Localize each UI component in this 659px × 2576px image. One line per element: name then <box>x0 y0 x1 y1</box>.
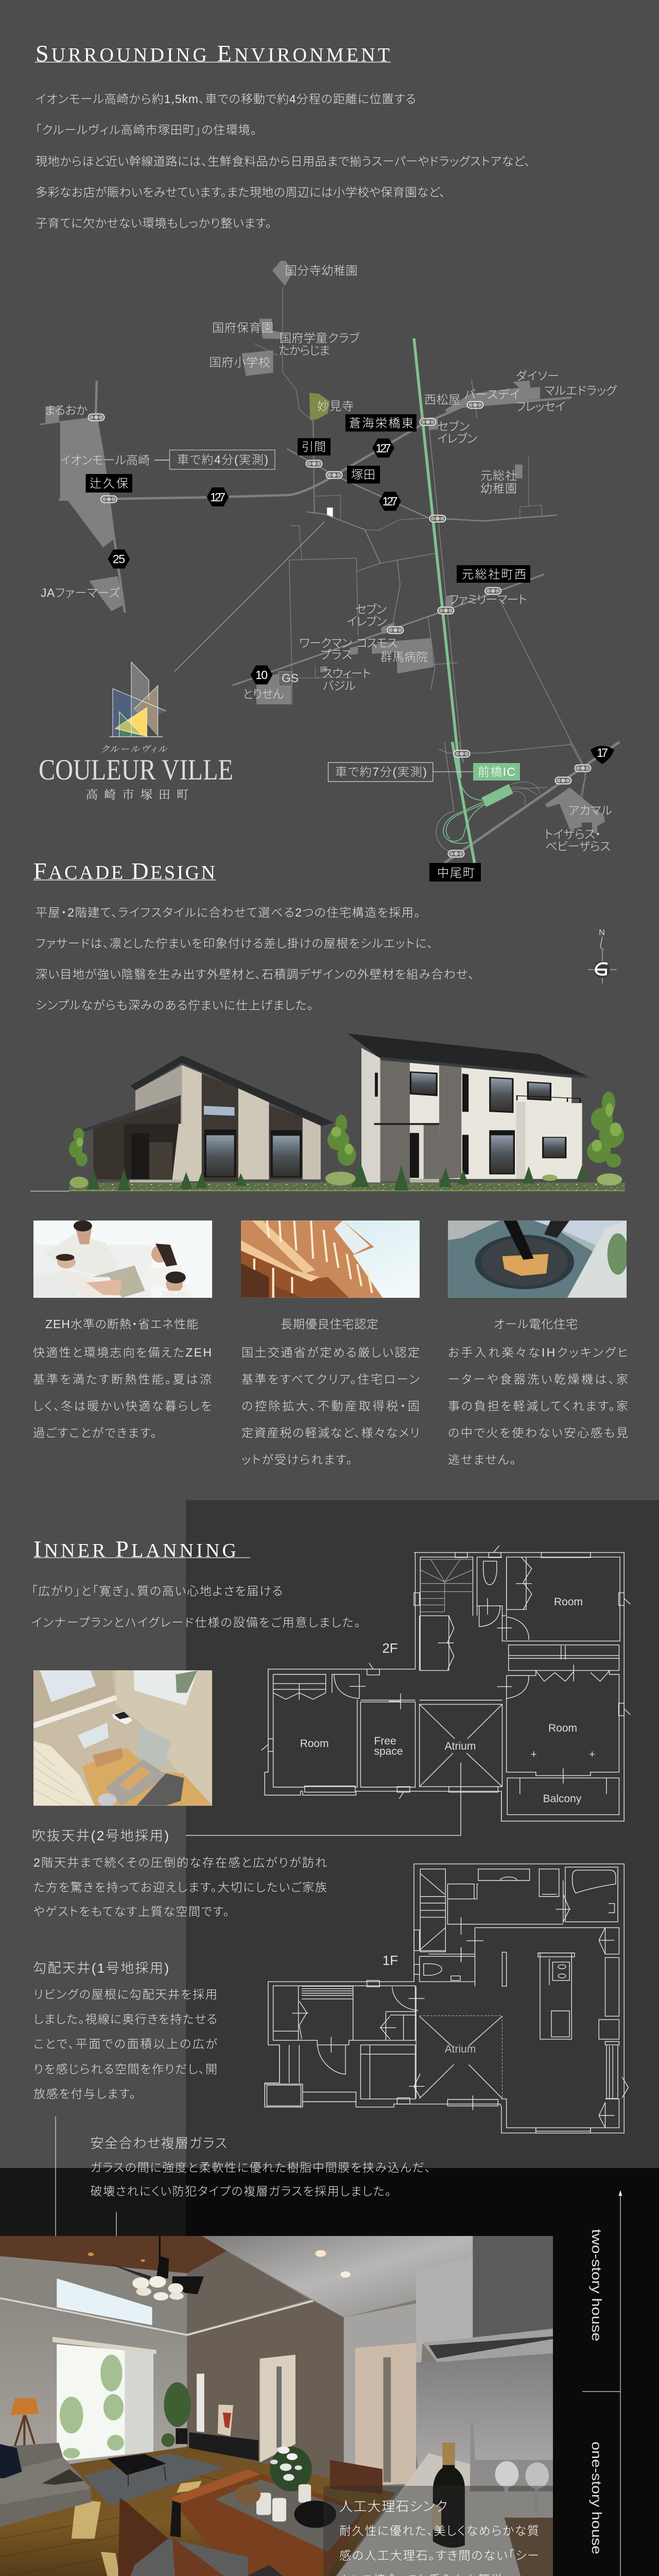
text block: long-life quality housing <box>241 1317 420 1466</box>
route shields: 127 <box>210 490 226 504</box>
map labels: facilities: アカマル <box>568 804 612 817</box>
text block: atrium ceiling: やゲストをもてなす上質な空間です。 <box>33 1905 229 1918</box>
heading: Surrounding Environment: SURROUNDING ENVIRONMENT <box>36 40 390 66</box>
text block: artificial marble sink: 耐久性に優れた、美しくなめらかな質 <box>339 2524 539 2537</box>
callout: 4 minutes by car: 車で約4分(実測) <box>177 453 268 466</box>
text block: laminated glass <box>91 2136 430 2198</box>
text block: all-electric housing: オール電化住宅 <box>494 1317 578 1331</box>
map labels: facilities: スウィート <box>322 667 371 680</box>
map labels: facilities: セブン <box>437 419 470 433</box>
decorative vertical leader lines <box>56 2116 116 2576</box>
room labels 1F: 1F <box>383 1953 398 1968</box>
room labels 2F: Free <box>374 1735 396 1747</box>
photo: living and dining room <box>0 2236 553 2576</box>
text block: sloped ceiling: ことで、平面での面積以上の広が <box>33 2037 217 2050</box>
text block: long-life quality housing: 長期優良住宅認定 <box>281 1317 378 1331</box>
logo: Couleur Ville: COULEUR VILLE <box>39 754 233 786</box>
text block: sloped ceiling: しました。視線に奥行きを持たせる <box>33 2012 217 2026</box>
text block: atrium ceiling: た方を驚きを持ってお迎えします。大切にしたいご家族 <box>33 1880 327 1894</box>
map labels: facilities <box>41 264 617 853</box>
map roads and buildings <box>40 261 586 798</box>
label: two-story house: two-story house <box>589 2229 604 2341</box>
text block: ZEH: 過ごすことができます。 <box>33 1426 157 1439</box>
text block: surrounding environment description: 現地からほど近い幹線道路には、生鮮食料品から日用品まで揃うスーパーやドラッグストアなど、 <box>36 155 530 168</box>
map labels: intersections: 辻久保 <box>90 477 128 490</box>
map labels: facilities: まるおか <box>44 403 88 417</box>
text block: ZEH: 基準を満たす断熱性能。夏は涼 <box>33 1372 212 1386</box>
heading: Facade Design: FACADE DESIGN <box>33 858 215 884</box>
text block: atrium ceiling: 吹抜天井(2号地採用) <box>32 1828 169 1843</box>
map labels: facilities: GS <box>282 671 299 685</box>
callout: 4 minutes by car <box>154 450 275 469</box>
text block: all-electric housing: の中で火を使わない安心感も見 <box>448 1426 628 1439</box>
map labels: facilities: 西松屋 <box>424 393 460 406</box>
trees and planting <box>69 1092 625 1191</box>
callout: 7 minutes by car, Maebashi IC: 車で約7分(実測) <box>335 765 427 778</box>
room labels 1F <box>383 1953 476 2055</box>
map labels: facilities: 国府学童クラブ <box>280 331 360 345</box>
text block: artificial marble sink: 感の人工大理石。すき間のない「シー <box>339 2549 539 2562</box>
map labels: facilities: たからじま <box>279 344 330 357</box>
map labels: facilities: セブン <box>355 603 387 616</box>
traffic signals <box>89 402 591 857</box>
photo: timber frame construction <box>241 1221 420 1298</box>
map labels: facilities: イレブン <box>437 432 477 445</box>
text block: long-life quality housing: 基準をすべてクリア。住宅ローン <box>241 1372 420 1386</box>
text block: laminated glass: ガラスの間に強度と柔軟性に優れた樹脂中間膜を挟み込んだ、 <box>91 2161 430 2174</box>
text block: ZEH: しく、冬は暖かい快適な暮らしを <box>33 1399 212 1413</box>
text block: all-electric housing <box>448 1317 628 1466</box>
map labels: intersections: 引間 <box>302 440 326 453</box>
room labels 2F: Room <box>554 1596 583 1608</box>
map labels: facilities: 国府保育園 <box>212 321 273 334</box>
text block: surrounding environment description <box>36 92 530 230</box>
room labels 2F <box>300 1596 583 1805</box>
callout: 7 minutes by car, Maebashi IC: 前橋IC <box>478 765 515 778</box>
text block: sloped ceiling: 放感を付与します。 <box>33 2087 135 2100</box>
text block: artificial marble sink: 人工大理石シンク <box>339 2499 447 2514</box>
text block: inner planning intro: インナープランとハイグレード仕様の設備をご用意しました。 <box>31 1616 360 1629</box>
text block: sloped ceiling: 勾配天井(1号地採用) <box>33 1960 169 1976</box>
text block: artificial marble sink <box>339 2499 539 2576</box>
room labels 2F: Room <box>548 1722 577 1734</box>
text block: facade description: 平屋・2階建て、ライフスタイルに合わせて選べる2つの住宅構造を採用。 <box>36 906 420 919</box>
map labels: facilities: バースデイ <box>464 387 520 401</box>
room labels 2F: Balcony <box>543 1793 582 1805</box>
text block: sloped ceiling: りを感じられる空間を作りだし、開 <box>33 2062 217 2076</box>
route shields: 10 <box>255 668 268 682</box>
logo: Couleur Ville <box>39 662 233 802</box>
text block: surrounding environment description: 「クルールヴィル高崎市塚田町」の住環境。 <box>36 123 256 137</box>
map labels: facilities: ベビーザらス <box>545 840 611 853</box>
route shields: 17 <box>597 746 608 759</box>
logo: Couleur Ville: 高崎市塚田町 <box>86 785 188 802</box>
label: one-story house: one-story house <box>589 2442 604 2554</box>
room labels 2F: Atrium <box>445 1740 476 1752</box>
route shields: 127 <box>382 495 397 508</box>
text block: facade description: ファサードは、凛とした佇まいを印象付ける差し掛けの屋根をシルエットに、 <box>36 937 433 950</box>
text block: facade description: シンプルながらも深みのある佇まいに仕上げました。 <box>36 998 313 1012</box>
text block: long-life quality housing: 定資産税の軽減など、様々なメリ <box>241 1426 420 1439</box>
map labels: facilities: 群馬病院 <box>380 650 428 664</box>
map labels: facilities: 国分寺幼稚園 <box>285 264 357 277</box>
route shields: 127 <box>376 442 391 455</box>
map labels: facilities: とりせん <box>242 687 284 701</box>
overlay panel: marble sink note background <box>323 2486 553 2576</box>
logo wordmark: クルールヴィル <box>101 744 168 754</box>
floor plan: 1F <box>265 1864 628 2133</box>
illustration: two houses facade <box>30 1033 625 1191</box>
text block: sloped ceiling: リビングの屋根に勾配天井を採用 <box>33 1988 217 2001</box>
text block: long-life quality housing: の控除拡大、不動産取得税・固 <box>241 1399 420 1413</box>
map labels: facilities: イオンモール高崎 <box>60 453 150 467</box>
room labels 2F: Room <box>300 1738 329 1750</box>
map labels: facilities: 妙見寺 <box>317 399 354 413</box>
text block: all-electric housing: 事の負担を軽減してくれます。家 <box>448 1399 628 1413</box>
map labels: facilities: 国府小学校 <box>209 355 270 369</box>
map labels: facilities: JAファーマーズ <box>41 586 120 600</box>
text block: surrounding environment description: 子育てに欠かせない環境もしっかり整います。 <box>36 216 271 230</box>
text block: all-electric housing: ーターや食器洗い乾燥機は、家 <box>448 1372 628 1386</box>
text block: sloped ceiling <box>33 1960 217 2100</box>
text block: all-electric housing: お手入れ楽々なIHクッキングヒ <box>448 1346 628 1359</box>
map labels: intersections: 蒼海栄橋東 <box>349 416 413 430</box>
text block: all-electric housing: 逃せません。 <box>448 1453 516 1466</box>
text block: ZEH <box>33 1317 212 1439</box>
map labels: intersections: 塚田 <box>351 468 375 481</box>
one-story house <box>80 1056 334 1189</box>
map labels: facilities: フレッセイ <box>516 400 565 413</box>
room labels 1F: Atrium <box>445 2043 476 2055</box>
text block: surrounding environment description: 多彩なお店が賑わいをみせています。また現地の周辺には小学校や保育園など、 <box>36 185 445 199</box>
photo: family in ZEH home <box>33 1221 212 1298</box>
map labels: facilities: イレブン <box>346 615 387 628</box>
text block: atrium ceiling: 2階天井まで続くその圧倒的な存在感と広がりが訪れ <box>33 1856 327 1869</box>
heading: Inner Planning: INNER PLANNING <box>33 1536 236 1562</box>
map labels: facilities: 元総社 <box>480 469 517 482</box>
icon: north compass <box>588 928 617 984</box>
map labels: facilities: ファミリーマート <box>449 592 527 606</box>
photo: induction cooktop with pan <box>448 1221 628 1298</box>
map labels: facilities: コスモス <box>356 636 397 650</box>
text block: laminated glass: 安全合わせ複層ガラス <box>91 2136 227 2151</box>
floor plan: 2F <box>262 1546 630 1821</box>
map interchange area <box>436 742 619 863</box>
text block: long-life quality housing: 国土交通省が定める厳しい認定 <box>241 1346 420 1359</box>
map labels: facilities: マルエドラッグ <box>544 384 617 397</box>
map labels: intersections <box>85 414 530 882</box>
text block: atrium ceiling <box>32 1828 327 1918</box>
text block: surrounding environment description: イオンモール高崎から約1,5km、車での移動で約4分程の距離に位置する <box>36 92 416 106</box>
map labels: facilities: バジル <box>323 679 356 692</box>
text block: laminated glass: 破壊されにくい防犯タイプの複層ガラスを採用しました。 <box>91 2184 391 2198</box>
photo: atrium looking down <box>33 1670 212 1806</box>
arrow: atrium connector <box>186 1762 461 1835</box>
route shields <box>108 438 614 764</box>
text block: facade description <box>36 906 474 1012</box>
map labels: facilities: ワークマン <box>299 636 352 650</box>
room labels 2F: space <box>374 1745 403 1757</box>
text block: inner planning intro: 「広がり」と「寛ぎ」、質の高い心地よさを届ける <box>31 1584 283 1598</box>
room labels 2F: 2F <box>382 1640 398 1656</box>
arrow: two-story and one-story scale <box>582 2190 622 2576</box>
map labels: intersections: 元総社町西 <box>462 568 526 581</box>
map labels: facilities: ダイソー <box>516 369 559 383</box>
map labels: facilities: 幼稚園 <box>480 482 517 495</box>
text block: ZEH: ZEH水準の断熱・省エネ性能 <box>45 1317 198 1331</box>
text block: facade description: 深い目地が強い陰翳を生み出す外壁材と、石積調デザインの外壁材を組み合わせ、 <box>36 968 474 981</box>
map: surrounding area <box>39 261 619 882</box>
map labels: facilities: プラス <box>320 648 352 662</box>
text block: inner planning intro <box>31 1584 360 1629</box>
text block: long-life quality housing: ットが受けられます。 <box>241 1453 352 1466</box>
route shields: 25 <box>113 552 125 566</box>
callout: 7 minutes by car, Maebashi IC <box>328 762 520 782</box>
map labels: intersections: 中尾町 <box>437 866 475 879</box>
logo mark <box>110 662 166 737</box>
icon: north compass: N <box>599 928 605 937</box>
map labels: facilities: トイザらス・ <box>544 827 601 841</box>
text block: ZEH: 快適性と環境志向を備えたZEH <box>33 1346 212 1359</box>
two-story house <box>348 1033 588 1189</box>
